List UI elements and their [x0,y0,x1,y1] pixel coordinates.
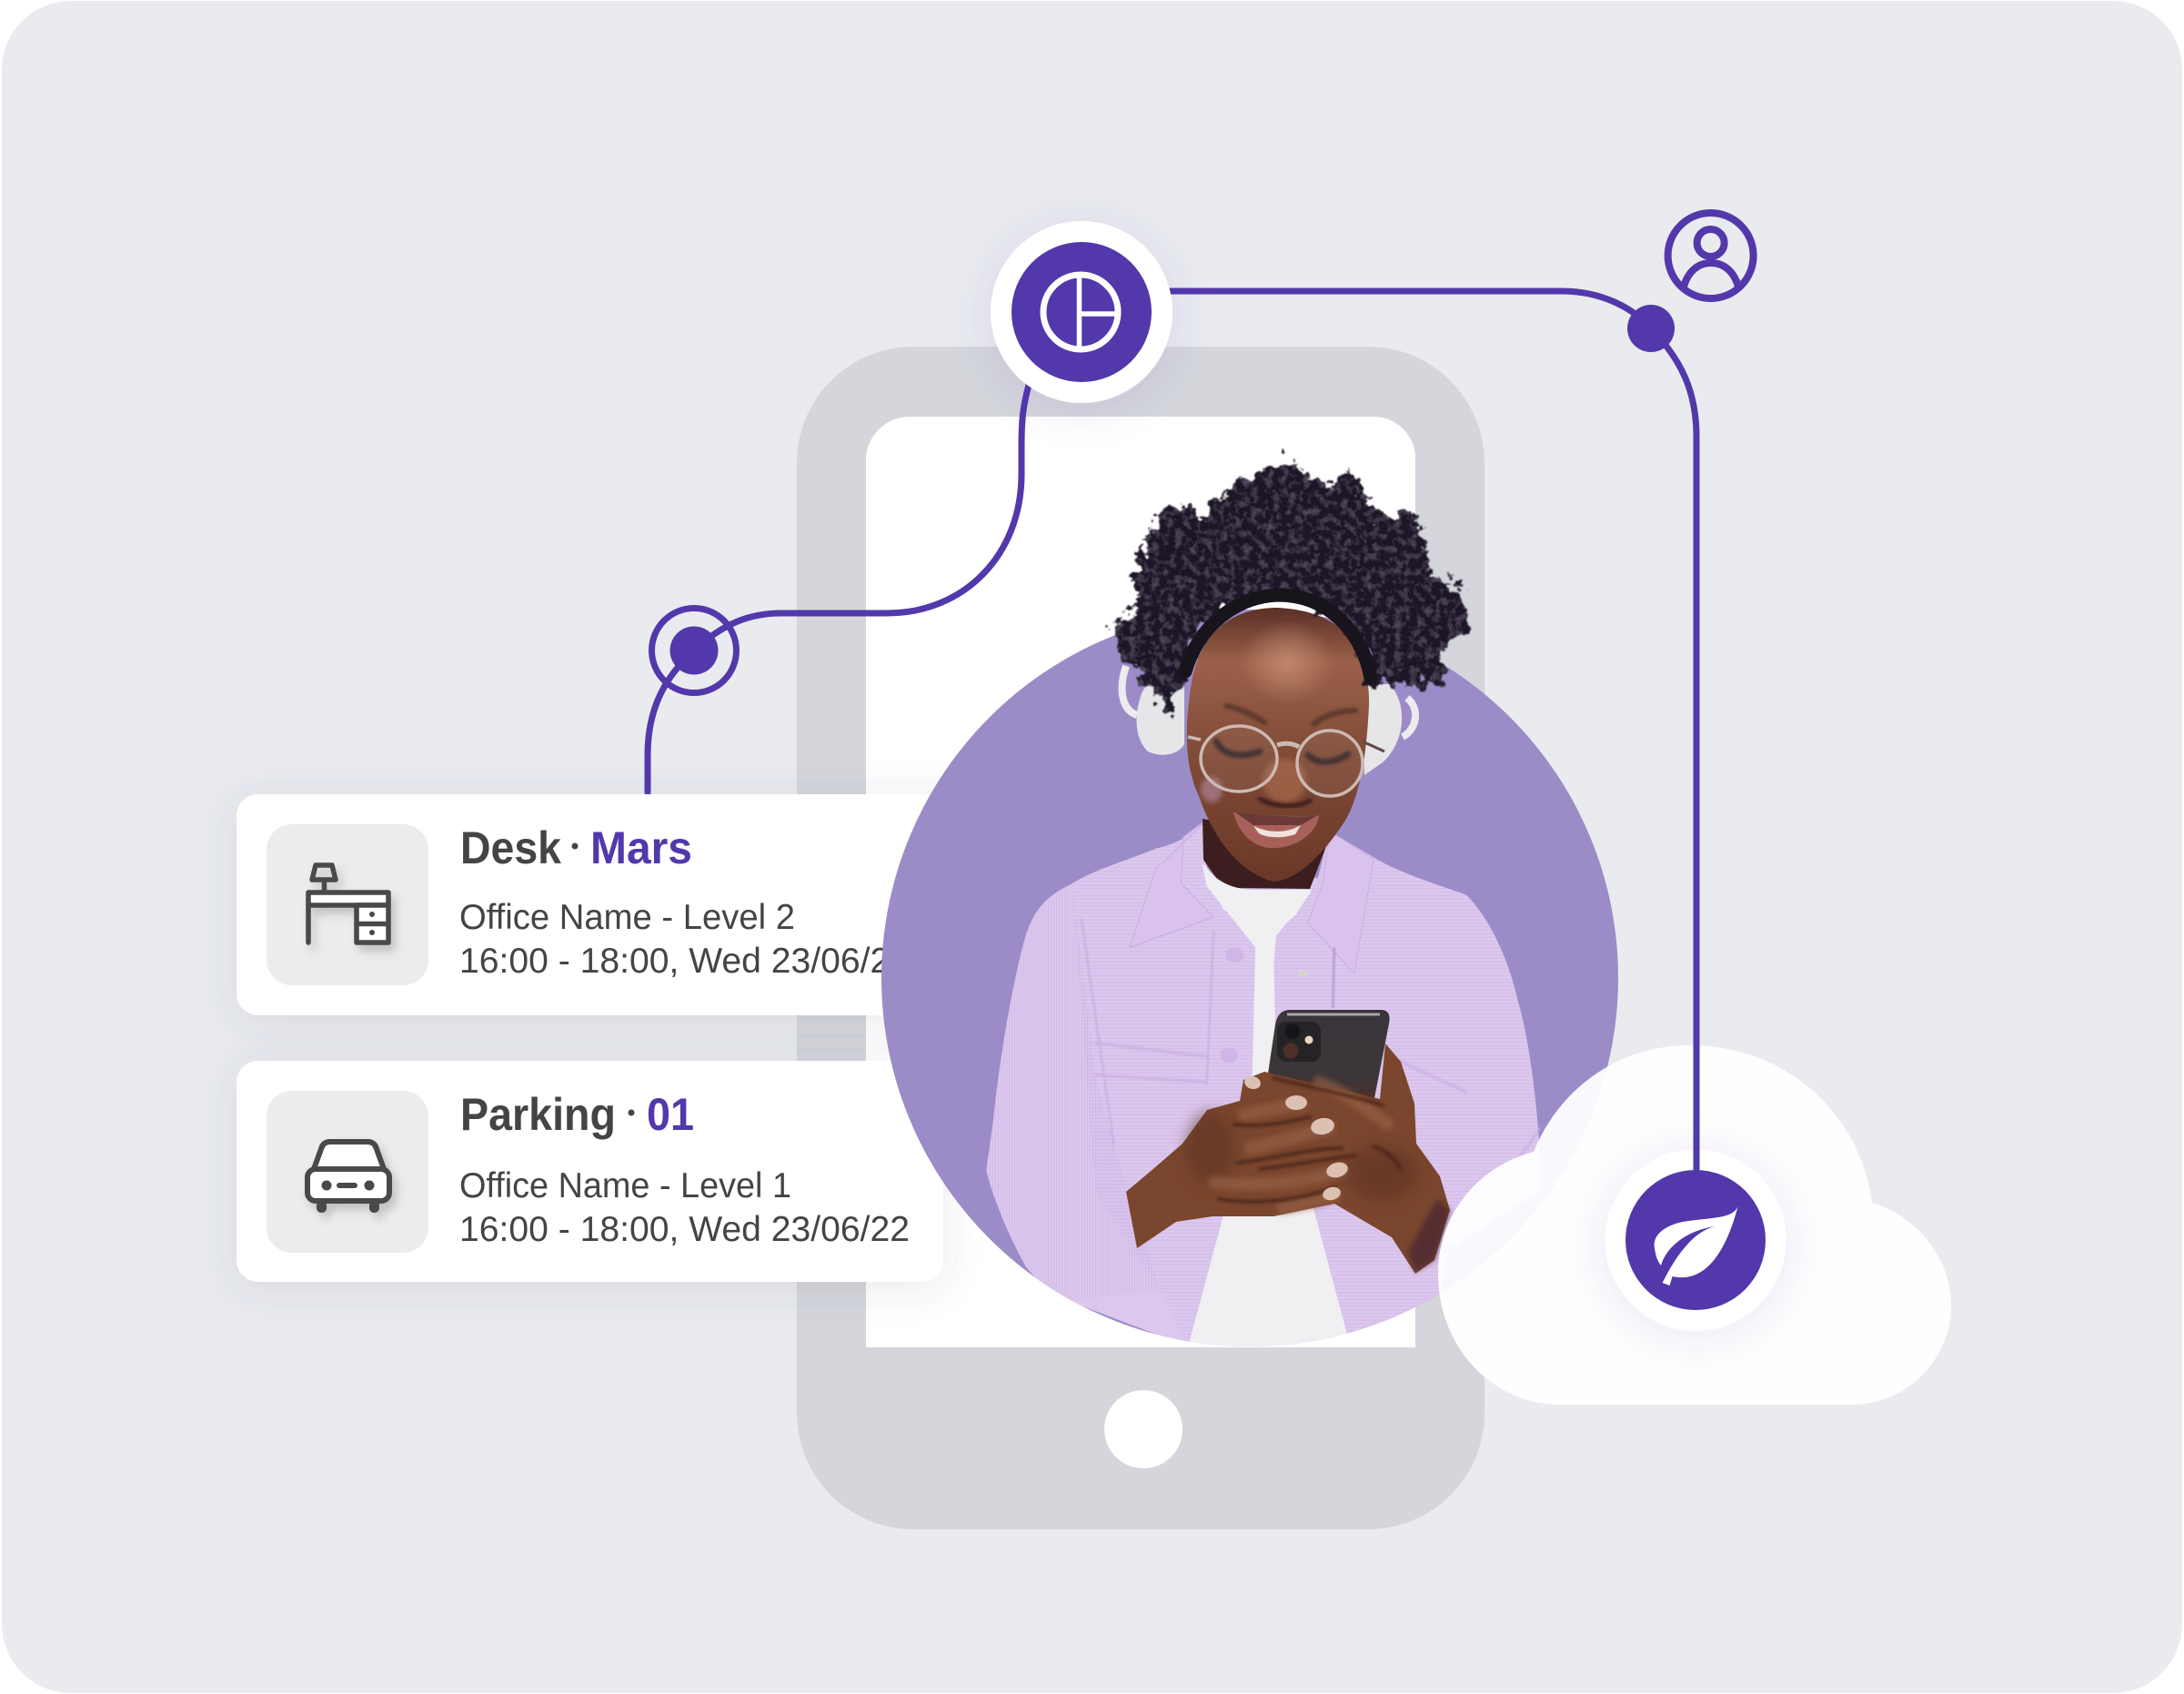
left band [1122,666,1137,715]
card title accent: 01 [647,1089,694,1140]
phone illustration [797,347,1485,1529]
card background [237,1061,943,1282]
eyes closed lashes [1216,741,1348,761]
cheek sheen [1201,777,1223,802]
connector lines [648,291,1696,1074]
icon: user avatar [1668,213,1754,298]
node: analytics badge [991,221,1173,403]
icon tile [267,824,428,985]
node: leaf badge [1605,1037,1786,1330]
avatar head [1697,229,1725,257]
sleeve rib texture [986,883,1161,1301]
booking card: parking [237,1061,943,1282]
person photo illustration [986,459,1541,1346]
jacket buttons [1225,947,1243,963]
node: target dot [651,608,737,693]
neck [1203,819,1328,889]
jacket rib texture [1072,820,1541,1346]
line: top node to target node [694,385,1029,650]
target centre [669,626,719,675]
line into badge [1694,1037,1699,1183]
phone top highlight [1287,1013,1380,1015]
location line: Office Name - Level 1 [459,1166,791,1205]
location line: Office Name - Level 2 [459,898,795,937]
badge outer ring [1605,1150,1786,1330]
eyebrows [1226,706,1355,724]
right collar [1308,832,1374,973]
phone body [1268,1010,1390,1103]
jacket and shirt [986,820,1541,1346]
node: junction dot [1627,305,1675,352]
headband [1185,595,1371,678]
right band [1403,698,1415,737]
booking card: desk [237,794,982,1015]
icon: desk with lamp [308,865,388,943]
teeth [1253,825,1301,837]
forehead highlight [1240,620,1334,704]
mouth [1233,812,1319,848]
jacket seams and pockets [1081,918,1541,1156]
left ear cup [1136,675,1184,755]
right ear cup [1363,684,1402,775]
hands silhouette [1126,1044,1450,1274]
card title accent: Mars [590,822,692,873]
icon: car [307,1142,389,1213]
card title: Parking [460,1089,616,1140]
phone screen [866,417,1415,1347]
wrist shadow [1408,1199,1450,1272]
camera flash [1304,1035,1313,1044]
camera lenses [1284,1024,1301,1039]
badge disc [1011,242,1152,382]
target ring [651,608,737,693]
line: target node to desk card [648,650,694,792]
phone home button [1104,1390,1183,1468]
fingernails [1243,1074,1350,1202]
finger highlights [1214,1083,1387,1208]
purple circle behind person [881,610,1618,1346]
line: top node to user dot and cloud [1170,291,1696,1074]
avatar ring [1668,213,1754,298]
finger gaps [1219,1078,1401,1202]
upper lip shade [1235,812,1318,825]
badge disc [1625,1170,1766,1310]
shirt [1188,863,1351,1346]
glasses [1188,726,1384,796]
time line: 16:00 - 18:00, Wed 23/06/22 [459,942,910,981]
time line: 16:00 - 18:00, Wed 23/06/22 [459,1210,910,1249]
badge outer ring [991,221,1173,403]
avatar shoulders [1684,263,1738,287]
card background [237,794,982,1015]
camera module [1277,1022,1321,1062]
title separator [628,1110,635,1115]
hair [1112,459,1469,714]
shirt neckline [1203,860,1312,928]
hands [1126,1044,1450,1274]
card title: Desk [460,822,561,873]
jacket body [986,820,1541,1346]
icon: leaf [1655,1206,1738,1286]
icon: pie chart [1043,274,1119,350]
handheld smartphone [1268,1010,1390,1103]
cloud [1438,1045,1951,1405]
left collar [1130,820,1213,947]
nose [1263,759,1306,802]
icon tile [267,1091,428,1253]
nose shadow [1260,799,1310,806]
phone body [797,347,1485,1529]
headphones [1122,666,1415,775]
title separator [571,842,579,850]
face [1187,608,1369,882]
knuckle shading [1186,1112,1233,1185]
